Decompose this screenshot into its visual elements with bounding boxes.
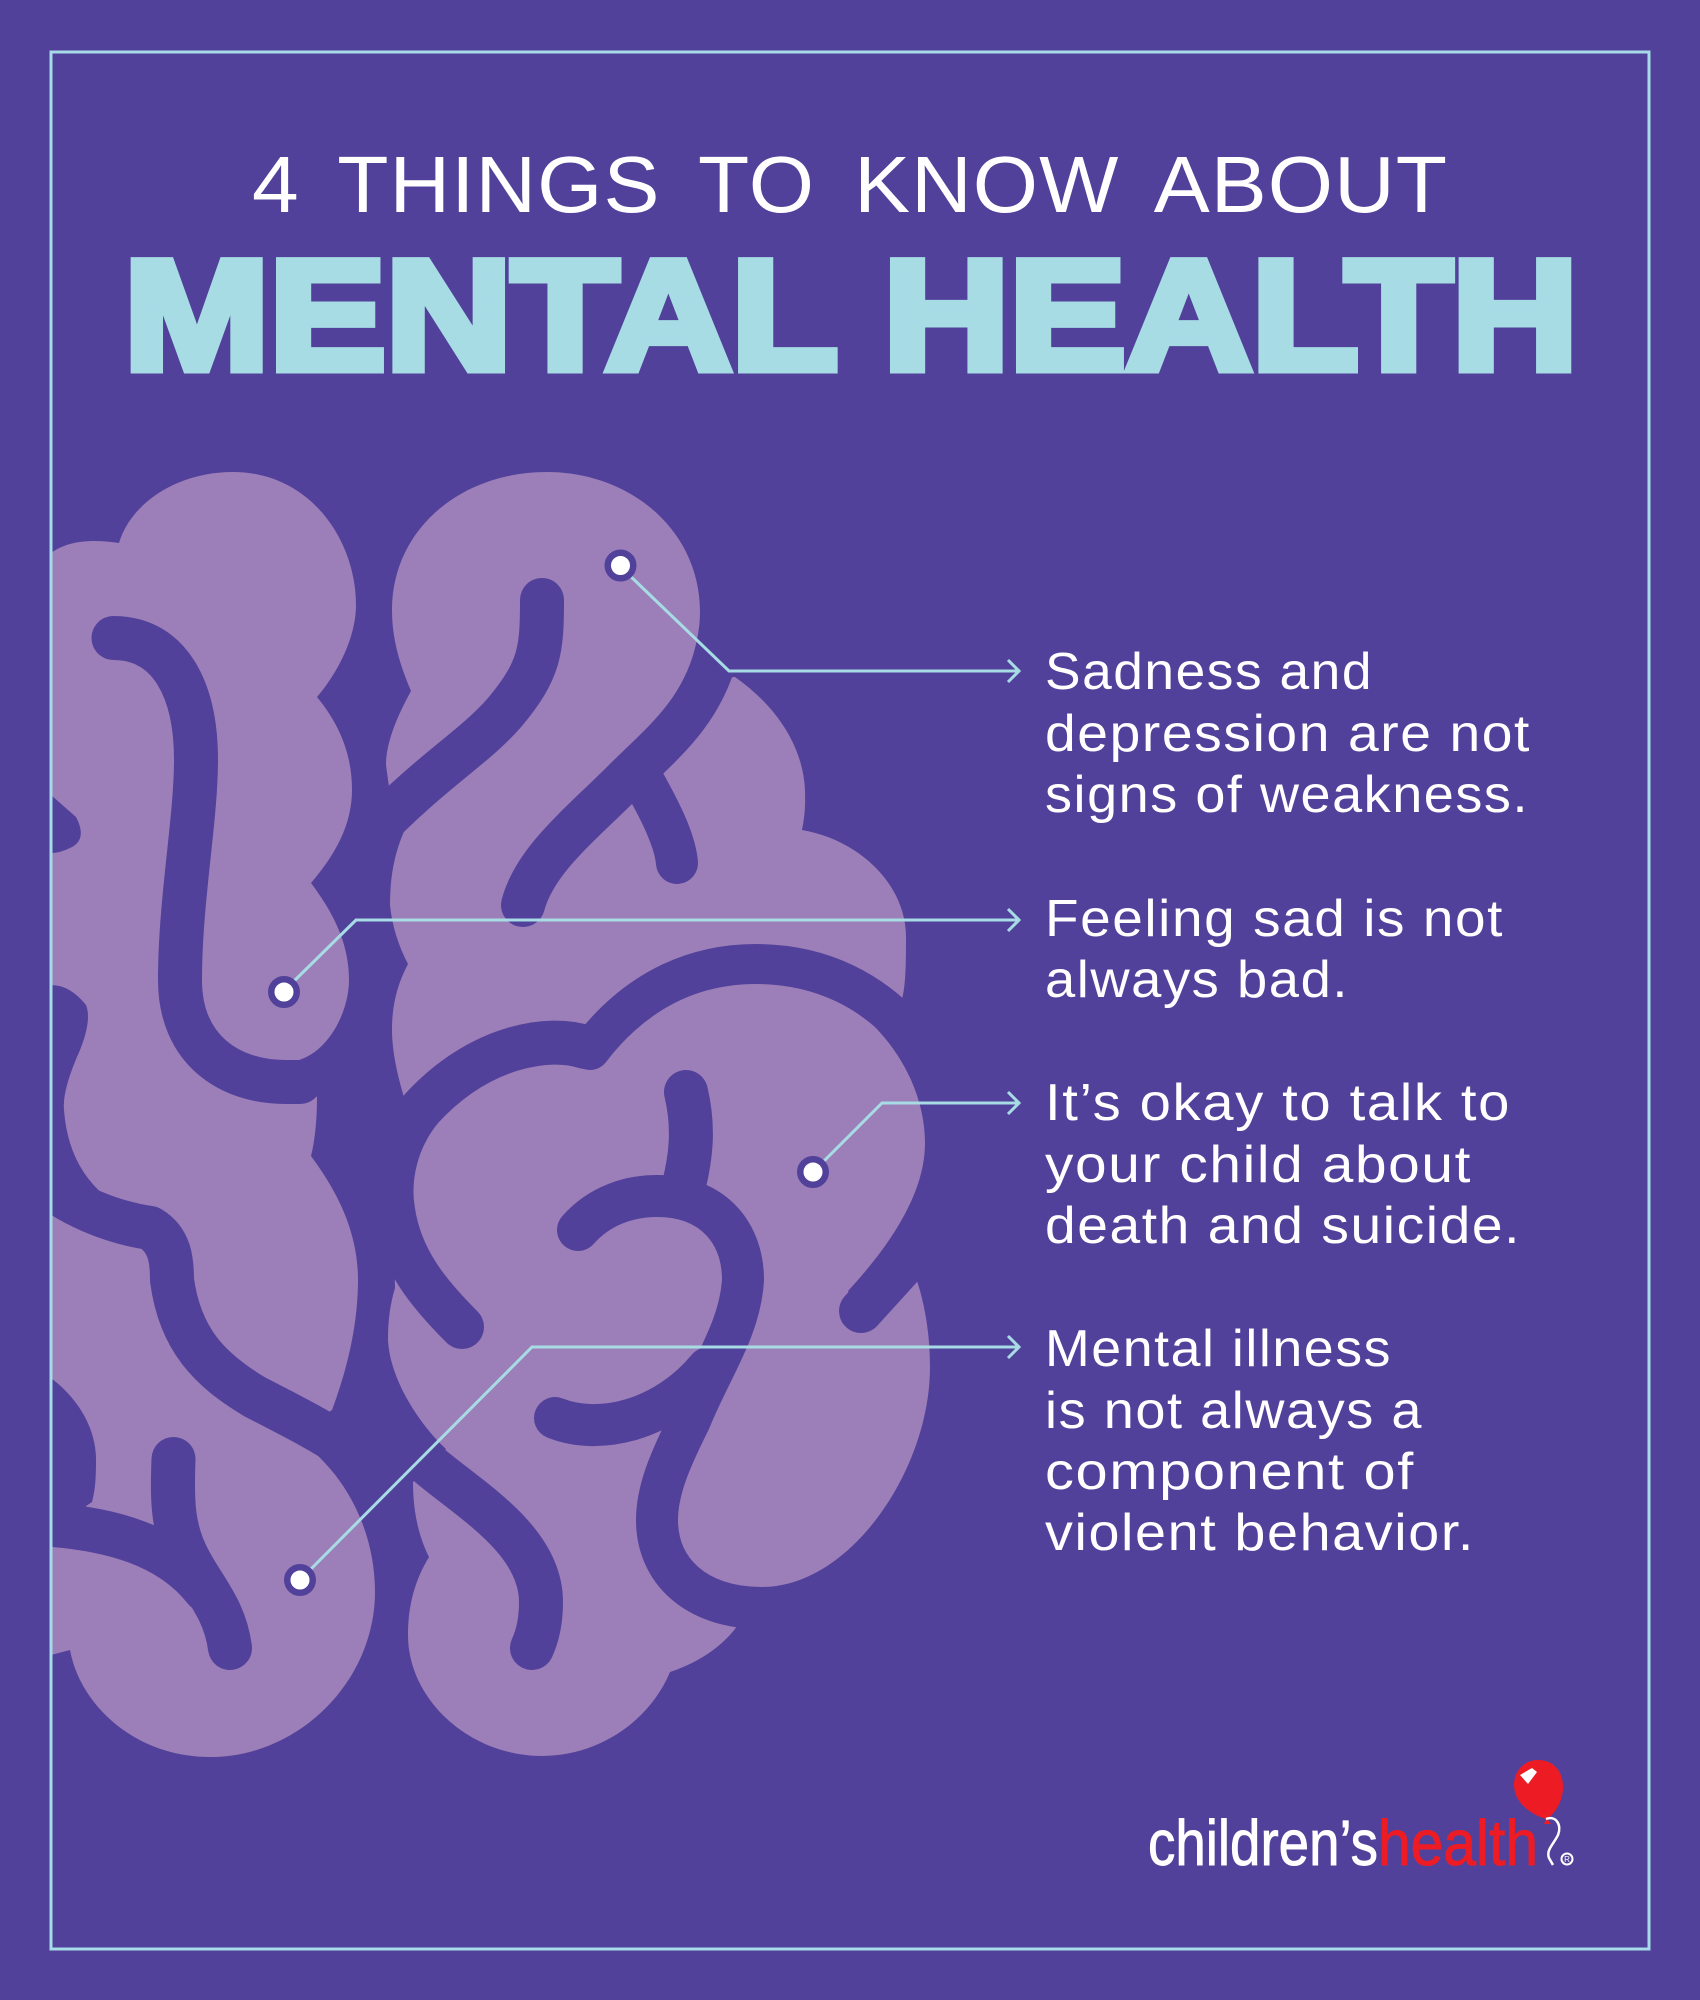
arrowhead 4: [1008, 1336, 1019, 1358]
callout 3: talk to your child: [800, 1074, 1521, 1255]
title: [124, 140, 1578, 403]
brain: left edge dark shapes: [52, 796, 99, 1506]
text block 4: is not always a: [1045, 1382, 1423, 1440]
connector line 2: [289, 920, 1018, 986]
registered mark: [1562, 1854, 1572, 1864]
icon: red balloon: [1514, 1760, 1563, 1865]
arrowhead 2: [1008, 909, 1019, 931]
text block 1: Sadness and: [1045, 643, 1373, 701]
callout 4: mental illness and violence: [287, 1320, 1475, 1593]
text block 3: your child about: [1045, 1136, 1472, 1194]
brain: right hemisphere: [386, 472, 930, 1756]
callout 2: feeling sad: [271, 890, 1504, 1009]
text block 4: component of: [1045, 1443, 1415, 1501]
marker dot 1: [608, 553, 633, 578]
left border segment over brain: [50, 52, 52, 1949]
text block 2: Feeling sad is not: [1045, 890, 1504, 948]
marker dot 3: [800, 1159, 826, 1185]
logo wordmark: health: health: [1378, 1807, 1538, 1879]
text block 1: [1045, 643, 1531, 824]
text block 2: always bad.: [1045, 951, 1349, 1009]
marker dot 2: [271, 979, 297, 1005]
text block 3: It’s okay to talk to: [1045, 1074, 1511, 1132]
brain illustration: [40, 472, 930, 1757]
brain: left hemisphere: [51, 472, 375, 1757]
connector line 4: [306, 1347, 1018, 1574]
registered mark: R: [1564, 1855, 1570, 1864]
arrowhead 1: [1008, 660, 1019, 682]
arrowhead 3: [1008, 1092, 1019, 1114]
text block 2: [1045, 890, 1504, 1009]
text block 3: death and suicide.: [1045, 1197, 1521, 1255]
connector line 3: [819, 1103, 1018, 1166]
text block 1: signs of weakness.: [1045, 766, 1529, 824]
text block 3: [1045, 1074, 1521, 1255]
marker dot 4: [287, 1567, 313, 1593]
connector line 1: [625, 571, 1018, 671]
callout 1: sadness and depression: [608, 553, 1531, 824]
text block 4: [1045, 1320, 1475, 1562]
text block 4: Mental illness: [1045, 1320, 1392, 1378]
logo: children's health: [1148, 1760, 1572, 1879]
title line: 4 things to know about: 4 THINGS TO KNOW ABOUT: [252, 140, 1448, 229]
logo wordmark: children's: children’s: [1148, 1807, 1378, 1879]
brain: sulci folds: [40, 600, 930, 1648]
text block 1: depression are not: [1045, 705, 1531, 763]
title line: mental health: MENTAL HEALTH: [124, 229, 1578, 403]
text block 4: violent behavior.: [1045, 1504, 1475, 1562]
